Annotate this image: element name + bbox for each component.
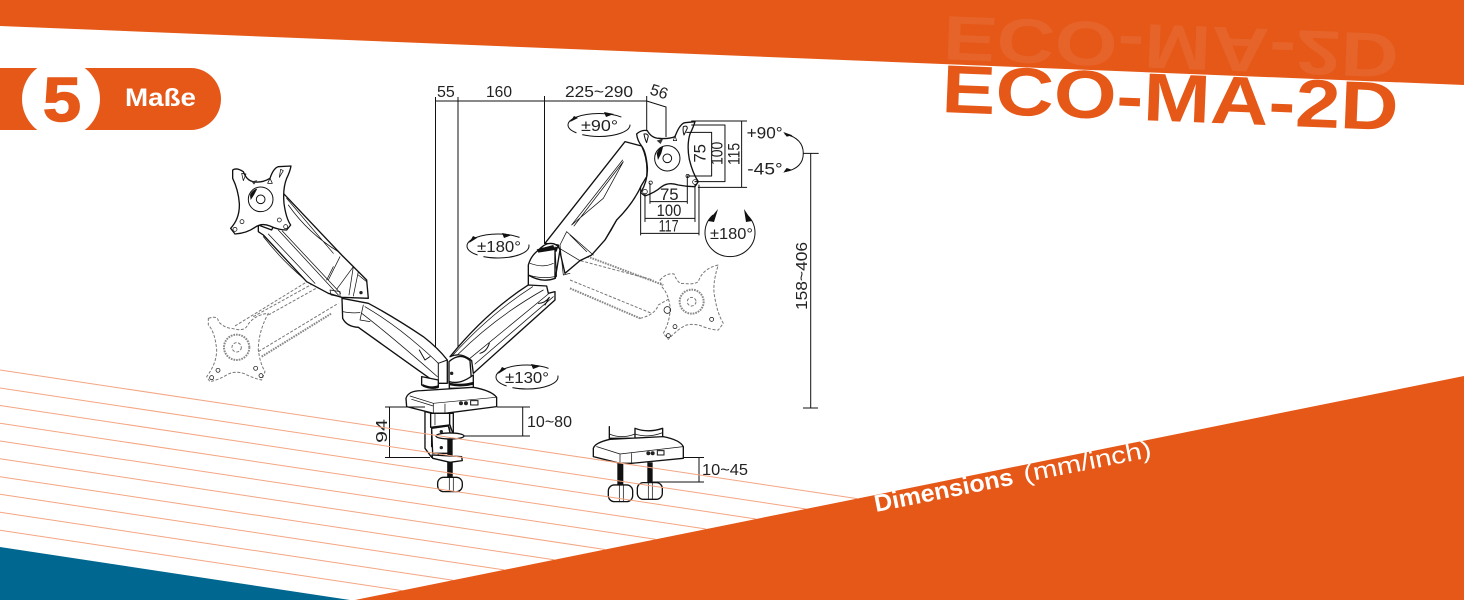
rotation annotation ±90: ±90° [581,118,618,135]
dimensions caption: (mm/inch) [1021,436,1154,488]
dimension lines: top widths: 55 [437,84,455,101]
tilt annotation +90 -45 [747,124,818,178]
tilt annotation +90 -45: -45° [747,160,783,178]
VESA dimensions: 75 [692,144,710,163]
section badge: Maße [125,84,196,112]
VESA dimensions: 100 [708,142,726,165]
height dimension 158~406 [794,153,818,408]
dimension lines: top widths [436,82,670,362]
rotation annotation ±130 ellipse: ±130° [505,370,549,387]
bottom blue corner [0,547,350,600]
clamp dimension 94 [374,407,430,458]
height dimension 158~406: 158~406 [794,242,811,310]
VESA dimensions [641,121,747,236]
right lower arm and elbow [449,245,555,383]
left lower arm and central column [342,298,447,385]
tilt annotation +90 -45: +90° [747,124,783,142]
dimension lines: top widths: 225~290 [565,84,633,101]
left monitor mounting plate [231,166,291,234]
section badge [0,68,221,130]
rotation annotation ±180 circle: ±180° [710,226,753,243]
rotation annotation ±130 ellipse [496,364,558,389]
VESA dimensions: 115 [725,143,743,165]
VESA dimensions: 75 [660,186,679,204]
right monitor arm [530,142,647,279]
clamp dimension 10~45: 10~45 [702,462,748,479]
VESA dimensions: 100 [657,202,681,220]
diagonal decorative lines [0,370,857,591]
ghost position: left monitor arm (dashed) [207,265,347,382]
mirrored title reflection: ECO-MA-2D [942,2,1400,90]
rotation annotation ±90 [568,112,630,136]
dimensions caption [872,436,1154,518]
clamp dimension 10~45 [652,458,748,482]
clamp dimension 10~80 [464,407,572,436]
second clamp base detail [593,427,683,502]
rotation annotation ±180 circle [705,209,755,257]
top orange band [0,0,1464,85]
clamp dimension 10~80: 10~80 [527,414,572,431]
ghost position: right monitor arm (dashed) [570,250,723,339]
title: ECO-MA-2D [940,51,1400,145]
section badge: 5 [43,66,81,135]
bottom orange band [355,376,1464,600]
dimensions caption: Dimensions [872,464,1015,518]
desk base and clamp [406,375,497,492]
right monitor mounting plate [637,122,698,196]
left monitor arm [258,193,368,298]
rotation annotation ±180 ellipse [467,233,529,258]
clamp dimension 94: 94 [374,419,391,443]
dimension lines: top widths: 160 [486,84,512,101]
rotation annotation ±180 ellipse: ±180° [477,239,521,256]
dimension lines: top widths: 56 [648,82,670,103]
VESA dimensions: 117 [659,218,679,236]
